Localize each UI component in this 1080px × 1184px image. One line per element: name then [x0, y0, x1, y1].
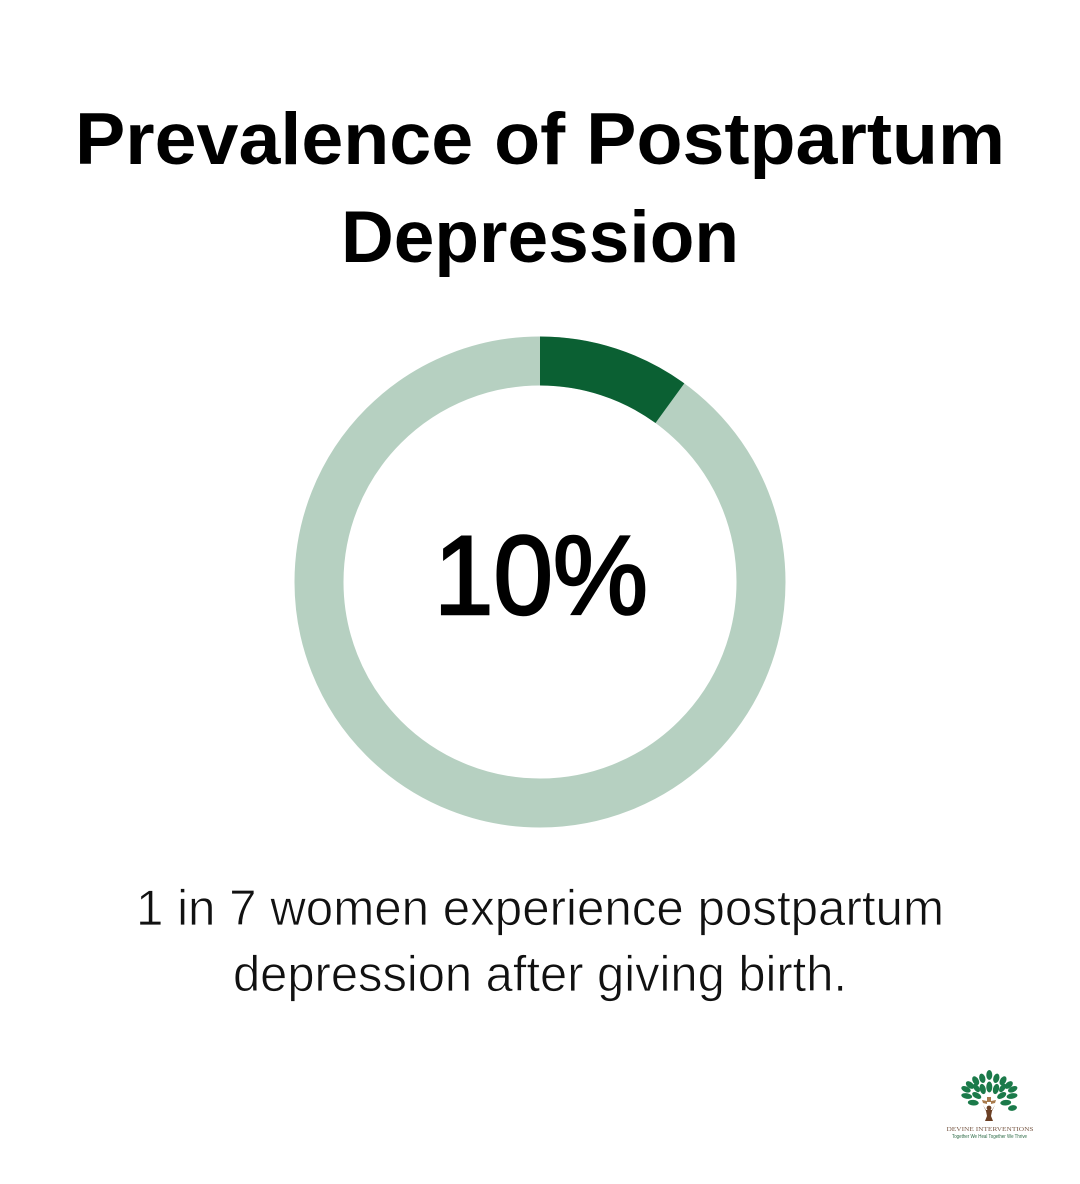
logo: Devine Interventions [946, 1070, 1034, 1140]
title [75, 99, 1005, 278]
icon: tree trunk figure [982, 1097, 996, 1121]
donut chart: 10% [319, 361, 761, 803]
center value: 10% [434, 513, 648, 638]
icon: tree leaves [960, 1070, 1018, 1112]
ring highlighted segment [540, 361, 670, 403]
title: Prevalence of Postpartum [75, 99, 1005, 180]
ring track [319, 361, 761, 803]
description text [136, 880, 944, 1002]
logo tagline: Together We Heal Together We Thrive [952, 1134, 1027, 1140]
logo name: DEVINE INTERVENTIONS [946, 1126, 1034, 1133]
description text: depression after giving birth. [233, 946, 847, 1002]
title: Depression [341, 197, 739, 278]
description text: 1 in 7 women experience postpartum [136, 880, 944, 936]
